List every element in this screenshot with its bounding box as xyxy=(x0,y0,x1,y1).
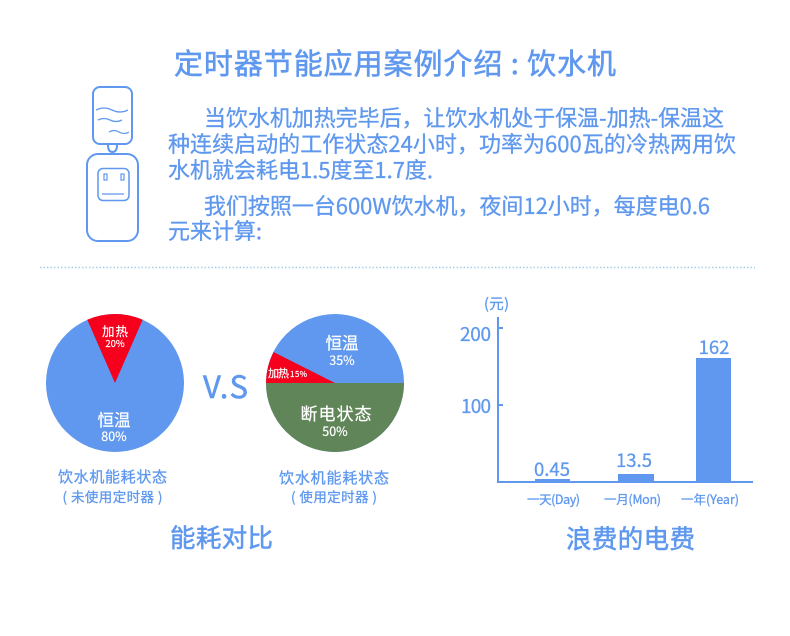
bar chart: wasted cost: 162 xyxy=(699,334,729,360)
pie chart: without timer: 恒温 xyxy=(98,407,130,431)
pie caption: without timer xyxy=(58,466,167,506)
bar chart: wasted cost: (元) xyxy=(484,293,509,314)
intro text: 元来计算: xyxy=(168,214,262,246)
bar chart: wasted cost: 一年(Year) xyxy=(681,489,739,508)
pie chart: with timer xyxy=(266,314,404,452)
bar chart: wasted cost xyxy=(460,293,753,508)
bar chart: wasted cost: 13.5 xyxy=(616,447,652,473)
intro text: 我们按照一台600W饮水机，夜间12小时，每度电0.6 xyxy=(204,189,710,221)
pie chart: without timer: 20% xyxy=(105,336,125,350)
pie chart: without timer xyxy=(46,314,184,452)
heading: wasted electricity cost: 浪费的电费 xyxy=(566,519,695,556)
pie chart: with timer: 断电状态 xyxy=(300,400,372,425)
icon: water dispenser xyxy=(87,87,138,241)
pie caption: without timer: 饮水机能耗状态 xyxy=(58,466,167,487)
pie caption: without timer: ( 未使用定时器 ) xyxy=(62,486,162,506)
bar chart: wasted cost: 一天(Day) xyxy=(527,489,580,508)
pie caption: with timer: 饮水机能耗状态 xyxy=(279,467,389,488)
bar chart: wasted cost: 0.45 xyxy=(534,456,570,482)
pie chart: without timer: 80% xyxy=(101,426,127,445)
bar chart: wasted cost: 100 xyxy=(461,392,491,419)
pie caption: with timer xyxy=(279,467,389,506)
pie caption: with timer: ( 使用定时器 ) xyxy=(291,486,377,506)
pie chart: with timer: 15% xyxy=(290,369,308,380)
label: V.S: V.S xyxy=(203,362,248,407)
pie chart: with timer: 35% xyxy=(329,350,355,369)
intro text: 水机就会耗电1.5度至1.7度. xyxy=(168,153,433,185)
intro text: 种连续启动的工作状态24小时，功率为600瓦的冷热两用饮 xyxy=(168,127,736,159)
pie chart: with timer: 加热 xyxy=(268,365,289,381)
intro text xyxy=(168,101,736,246)
intro text: 当饮水机加热完毕后，让饮水机处于保温-加热-保温这 xyxy=(204,101,724,133)
heading: energy comparison: 能耗对比 xyxy=(170,518,273,555)
bar chart: wasted cost: 一月(Mon) xyxy=(604,489,661,508)
pie chart: with timer: 恒温 xyxy=(326,330,358,354)
bar chart: wasted cost: 200 xyxy=(460,320,491,347)
pie chart: with timer: 50% xyxy=(322,421,348,440)
pie chart: without timer: 加热 xyxy=(102,321,128,340)
title: 定时器节能应用案例介绍 : 饮水机 xyxy=(174,41,616,83)
